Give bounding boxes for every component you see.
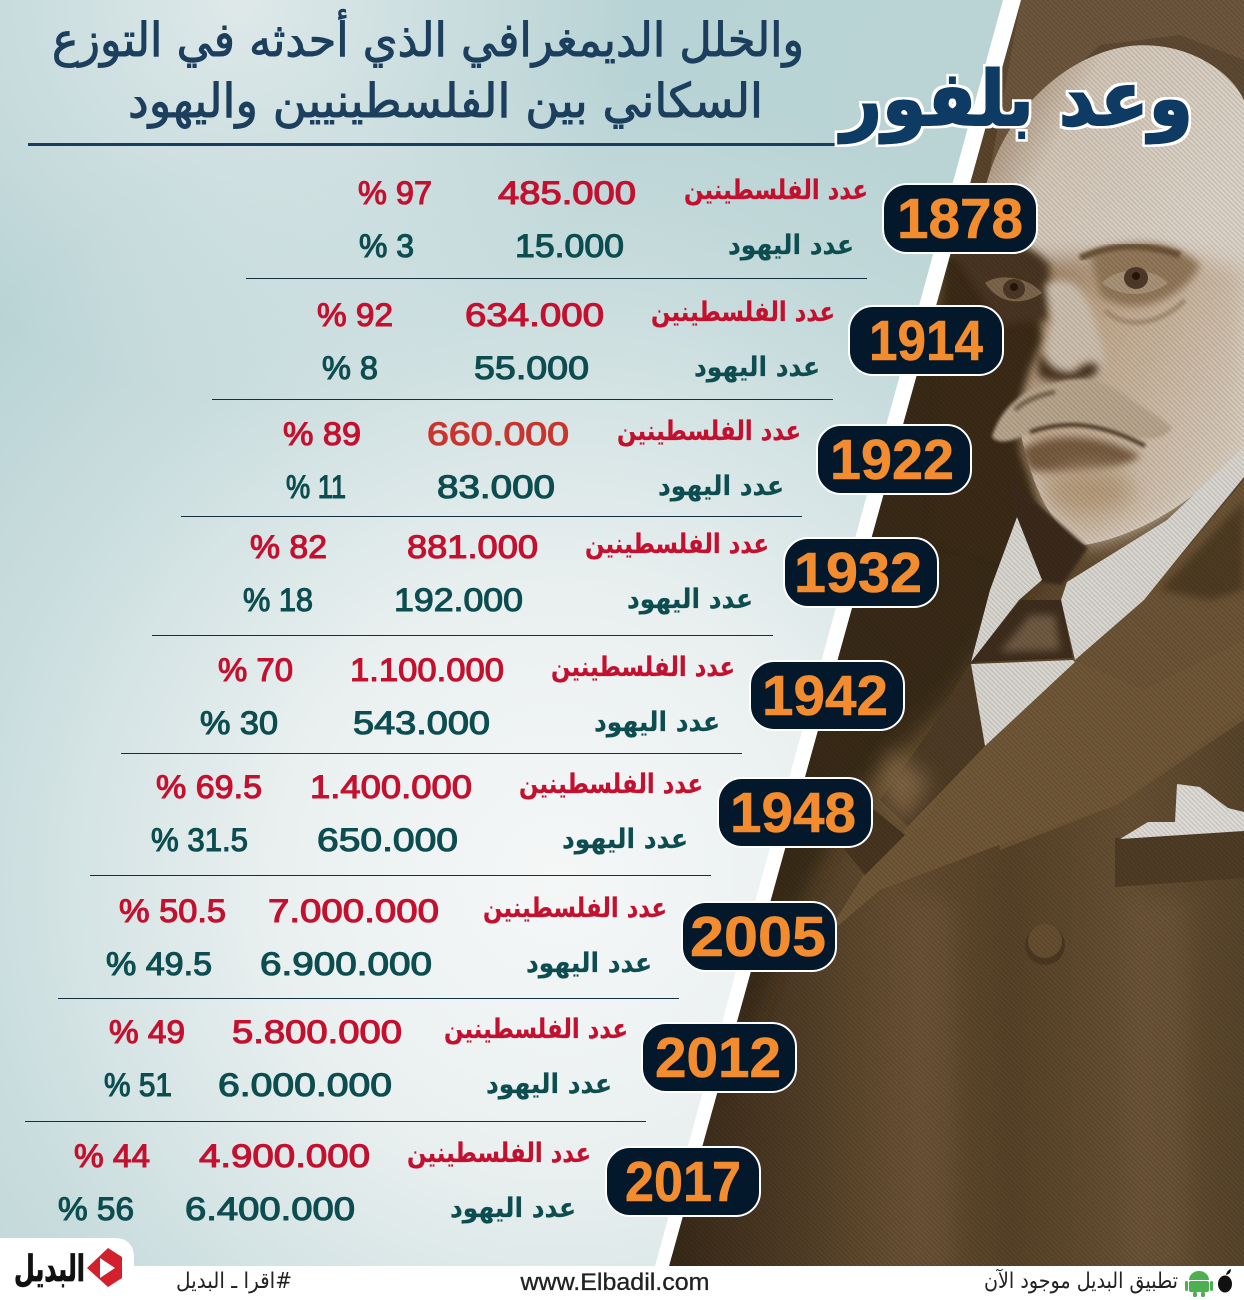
necktie — [971, 600, 1073, 662]
row 1922: عدد اليهود — [658, 471, 784, 502]
row 2017: 6.400.000 — [185, 1191, 355, 1227]
row 2005: % 49.5 — [106, 946, 212, 982]
row 1942 — [121, 652, 904, 754]
row 2017: عدد اليهود — [450, 1193, 576, 1224]
row 1932: عدد اليهود — [627, 584, 753, 615]
row 2017 — [58, 1138, 760, 1227]
row 1878: عدد الفلسطينين — [684, 175, 868, 206]
row 1942: عدد اليهود — [594, 707, 720, 738]
footer band — [0, 1266, 1244, 1300]
icon: apple — [1218, 1269, 1232, 1292]
logo: Elbadil: البديل — [14, 1249, 85, 1290]
row 2005: عدد الفلسطينين — [483, 893, 667, 924]
row 1942: % 70 — [218, 652, 293, 688]
row 1914: عدد الفلسطينين — [651, 297, 835, 328]
row 1878: 15.000 — [515, 228, 624, 264]
row 1932: % 82 — [250, 529, 327, 565]
row 2017: 2017 — [625, 1150, 741, 1214]
row 1932: 881.000 — [407, 529, 538, 565]
row 1914: عدد اليهود — [694, 352, 820, 383]
heading underline — [28, 143, 842, 146]
subtitle heading — [52, 9, 804, 129]
row 1914: 55.000 — [474, 350, 589, 386]
row 1922: % 89 — [283, 416, 361, 452]
footer app note: تطبيق البديل موجود الآن — [984, 1268, 1178, 1294]
row 1878: 1878 — [897, 187, 1023, 251]
row 1878: 485.000 — [498, 175, 636, 211]
row 1932 — [152, 529, 938, 636]
row 1914: 634.000 — [465, 297, 604, 333]
row 2017: % 56 — [58, 1191, 134, 1227]
logo: Elbadil — [0, 1238, 134, 1300]
subtitle heading: السكاني بين الفلسطينيين واليهود — [128, 74, 763, 129]
row 1948: 650.000 — [317, 822, 458, 858]
row 2005: 7.000.000 — [268, 893, 439, 929]
left eye — [985, 277, 1042, 301]
row 1922 — [181, 416, 971, 517]
row 1878: عدد اليهود — [728, 230, 854, 261]
row 1932: 192.000 — [394, 582, 523, 618]
row 2017: % 44 — [74, 1138, 150, 1174]
row 1942: 543.000 — [353, 705, 490, 741]
row 1922: 1922 — [830, 428, 954, 492]
row 1948: % 31.5 — [151, 822, 248, 858]
row 2012: عدد اليهود — [486, 1069, 612, 1100]
shirt collar and shirt front — [971, 447, 1244, 746]
row 1878 — [246, 175, 1037, 279]
right eye — [1102, 267, 1185, 322]
row 2005: عدد اليهود — [526, 948, 652, 979]
icon: android — [1185, 1271, 1213, 1297]
footer hashtag: #اقرا ـ البديل — [176, 1269, 292, 1294]
row 1948: 1948 — [730, 781, 856, 845]
row 1932: % 18 — [243, 582, 313, 618]
row 1942: % 30 — [200, 705, 278, 741]
row 1878: % 97 — [358, 175, 432, 211]
pocket square — [1120, 784, 1244, 839]
row 2005: 2005 — [690, 905, 826, 969]
row 1942: 1.100.000 — [350, 652, 504, 688]
row 2012: 2012 — [655, 1026, 781, 1090]
row 2005: 6.900.000 — [260, 946, 432, 982]
row 2012 — [25, 1014, 796, 1122]
row 1914: % 8 — [322, 350, 378, 386]
white diagonal strip — [655, 0, 1021, 1266]
row 1948: 1.400.000 — [310, 769, 472, 805]
nose — [1038, 280, 1104, 382]
pocket flap — [1115, 830, 1244, 887]
row 1914: 1914 — [869, 309, 983, 373]
row 1914 — [212, 297, 1003, 400]
moustache — [992, 379, 1172, 446]
row 2012: % 49 — [109, 1014, 185, 1050]
row 2017: 4.900.000 — [199, 1138, 370, 1174]
subtitle heading: والخلل الديمغرافي الذي أحدثه في التوزع — [52, 9, 804, 68]
row 1878: % 3 — [359, 228, 414, 264]
footer website: www.Elbadil.com — [519, 1269, 710, 1296]
row 1922: 660.000 — [427, 416, 569, 452]
row 1932: عدد الفلسطينين — [585, 529, 769, 560]
row 2005 — [58, 893, 836, 999]
row 1914: % 92 — [317, 297, 393, 333]
row 2012: 5.800.000 — [232, 1014, 402, 1050]
main title: وعد بلفور — [837, 54, 1193, 144]
row 1932: 1932 — [794, 541, 922, 605]
portrait photograph — [660, 0, 1244, 1270]
row 1948 — [90, 769, 872, 876]
row 1922: % 11 — [286, 469, 346, 505]
row 1948: عدد اليهود — [562, 824, 688, 855]
row 1942: عدد الفلسطينين — [551, 652, 735, 683]
row 2012: 6.000.000 — [218, 1067, 392, 1103]
row 1922: عدد الفلسطينين — [617, 416, 801, 447]
row 1922: 83.000 — [437, 469, 555, 505]
row 1948: % 69.5 — [156, 769, 262, 805]
row 2012: % 51 — [104, 1067, 172, 1103]
row 2005: % 50.5 — [119, 893, 226, 929]
row 1942: 1942 — [762, 664, 888, 728]
row 2017: عدد الفلسطينين — [407, 1138, 591, 1169]
row 2012: عدد الفلسطينين — [444, 1014, 628, 1045]
coat button — [1025, 924, 1065, 965]
row 1948: عدد الفلسطينين — [519, 769, 703, 800]
